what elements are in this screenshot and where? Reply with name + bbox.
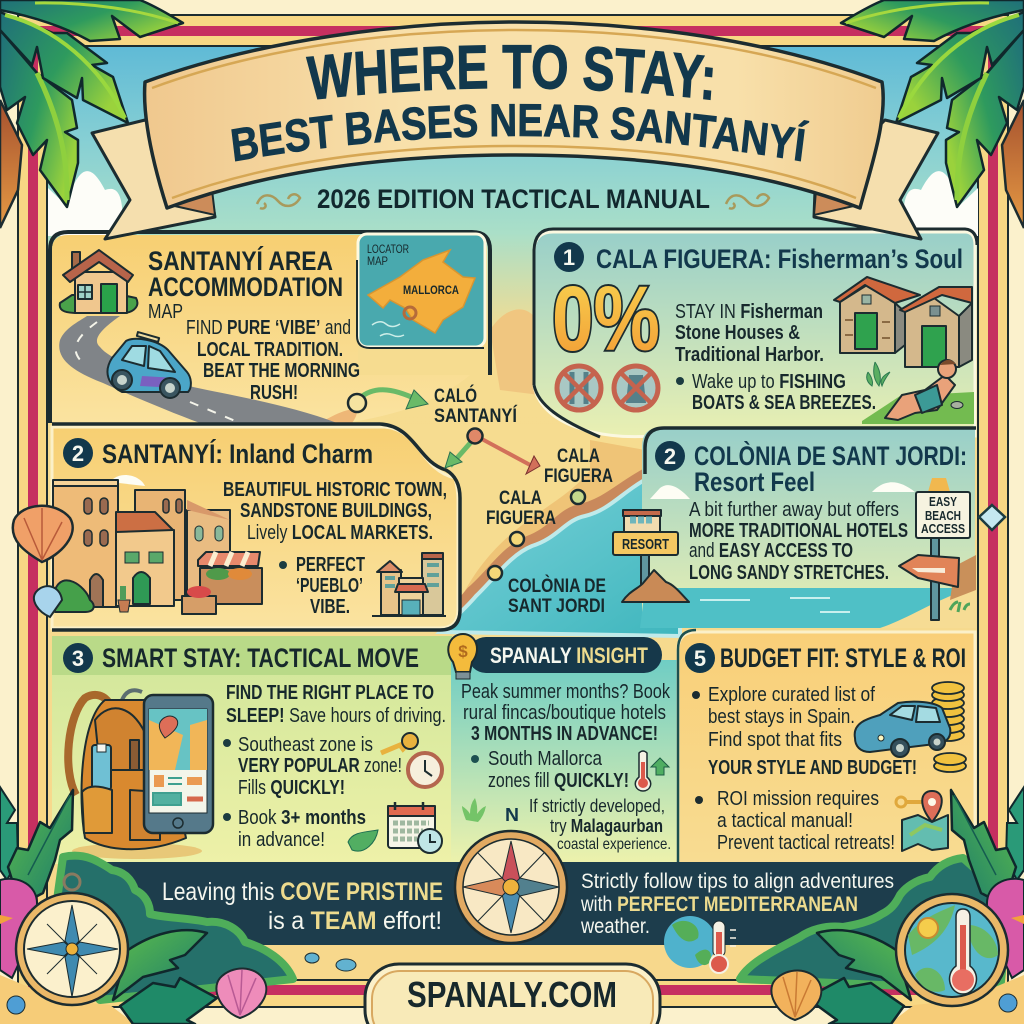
text: explore curated list: Explore curated list of — [708, 684, 875, 706]
heading: Santanyí area accommodation: SANTANYÍ AREA — [148, 245, 333, 276]
badge 5 — [685, 643, 715, 673]
text: a bit further away: LONG SANDY STRETCHES. — [689, 562, 889, 584]
badge 1 — [554, 242, 584, 272]
text: peak summer months — [461, 681, 671, 745]
text: leaving this cove pristine: Leaving this COVE PRISTINE — [162, 878, 443, 906]
locator map — [357, 234, 485, 348]
bottom foliage right — [807, 787, 1024, 1024]
text: beautiful historic town: SANDSTONE BUILDINGS, — [240, 500, 432, 522]
map labels: CALA — [557, 446, 600, 467]
text: ROI mission: a tactical manual! — [717, 810, 853, 832]
clouds — [48, 171, 978, 236]
text: explore curated list — [692, 684, 917, 779]
icon: no crowds crossed signs — [557, 366, 658, 410]
text: a bit further away — [689, 499, 908, 584]
icon: house — [60, 250, 137, 313]
text: beautiful historic town: Lively LOCAL MARKETS. — [247, 522, 433, 544]
map labels: SANTANYÍ — [434, 405, 518, 427]
text: book 3+ months: Book 3+ months — [238, 807, 366, 829]
panel: Colònia de Sant Jordi resort feel — [640, 428, 976, 628]
heading: smart stay: SMART STAY: TACTICAL MOVE — [102, 643, 419, 673]
locator map: MAP — [367, 254, 388, 268]
text: southeast zone: VERY POPULAR zone! — [238, 755, 402, 777]
map labels: CALÓ — [434, 385, 477, 407]
badge 2: 2 — [72, 441, 84, 466]
icon: resort sign and rock — [613, 510, 689, 602]
text: leaving this cove pristine: is a TEAM effort! — [268, 907, 442, 935]
panel: Santanyí area accommodation map — [50, 232, 490, 423]
icon: light bulb: $ — [458, 642, 468, 661]
text: leaving this cove pristine — [162, 878, 443, 935]
text: perfect pueblo vibe: ‘PUEBLO’ — [296, 575, 363, 597]
palm tree right — [841, 0, 1024, 228]
text: south Mallorca: South Mallorca — [488, 748, 603, 770]
panel: smart stay tactical move — [52, 636, 452, 864]
badge 2 — [63, 438, 93, 468]
text: stay in fisherman stone houses: Stone Houses & — [675, 322, 800, 344]
compass: center — [455, 831, 567, 943]
text: perfect pueblo vibe: VIBE. — [310, 596, 350, 618]
text: peak summer months: 3 MONTHS IN ADVANCE! — [471, 723, 658, 745]
text: stay in fisherman stone houses — [675, 301, 824, 366]
text: wake up to fishing boats: Wake up to FISHING — [692, 371, 846, 393]
icon: small town buildings — [372, 553, 446, 616]
badge 2 — [655, 441, 685, 471]
water and beach — [640, 555, 976, 628]
bottom foliage left — [0, 787, 217, 1024]
title: BEST BASES NEAR SANTANYÍ — [231, 104, 810, 162]
text: a bit further away: MORE TRADITIONAL HOTELS — [689, 520, 908, 542]
text: find the right place — [226, 682, 446, 727]
icon: easy beach access signpost: EASY — [929, 494, 957, 509]
map route: arrows and stops — [348, 390, 585, 580]
map labels: COLÒNIA DE — [508, 575, 606, 597]
icon: key, pin and map — [896, 791, 948, 851]
heading: inland charm: SANTANYÍ: Inland Charm — [102, 438, 373, 469]
icon: coins — [932, 682, 966, 772]
text: explore curated list: best stays in Spain. — [708, 706, 855, 728]
map labels: CALA — [499, 488, 542, 509]
icon: grass — [462, 798, 486, 822]
weather globe medallion: right — [896, 894, 1008, 1006]
text: beautiful historic town: BEAUTIFUL HISTORIC TOWN, — [223, 479, 447, 501]
text: strictly follow tips: with PERFECT MEDITERRANEAN — [580, 893, 858, 916]
icon: light bulb — [448, 634, 477, 679]
title: WHERE TO STAY: — [306, 44, 713, 100]
text: peak summer months: rural fincas/boutique hotels — [463, 702, 666, 724]
title — [231, 44, 810, 162]
text: wake up to fishing boats: BOATS & SEA BREEZES. — [692, 392, 876, 414]
website pill — [365, 964, 660, 1024]
map: central sand and coast — [340, 309, 648, 640]
subtitle: 2026 EDITION TACTICAL MANUAL — [317, 184, 710, 214]
bush right — [740, 858, 1010, 990]
compass: left — [16, 874, 128, 1005]
icon: calendar and leaf — [348, 802, 442, 853]
badge 3 — [63, 643, 93, 673]
icon: easy beach access signpost: ACCESS — [921, 521, 965, 536]
icon: key and clock — [381, 733, 442, 787]
panel: Spanaly insight — [448, 634, 678, 864]
text: explore curated list: YOUR STYLE AND BUDGET! — [708, 757, 917, 779]
text: southeast zone — [223, 734, 402, 799]
heading: Colònia de Sant Jordi — [694, 440, 967, 497]
heading: Colònia de Sant Jordi: Resort Feel — [694, 467, 815, 497]
illustration: sandstone town — [53, 475, 230, 612]
icon: resort sign and rock: RESORT — [622, 536, 669, 553]
letter N: N — [505, 805, 519, 825]
text: find the right place: SLEEP! Save hours of driving. — [226, 705, 446, 727]
heading: Santanyí area accommodation — [148, 245, 343, 323]
text: a bit further away: and EASY ACCESS TO — [689, 540, 853, 562]
map labels: SANT JORDI — [508, 596, 605, 617]
text: south Mallorca — [471, 748, 629, 792]
text: stay in fisherman stone houses: Traditional Harbor. — [675, 344, 824, 366]
text: beautiful historic town — [223, 479, 447, 544]
heading: Santanyí area accommodation: ACCOMMODATION — [148, 272, 343, 302]
panel: Santanyí inland charm — [52, 424, 460, 630]
text: strictly follow tips — [580, 870, 894, 938]
stat: 0%: 0% — [552, 268, 660, 370]
panel: Cala Figuera fisherman's soul — [534, 229, 977, 437]
illustration: backpack — [68, 690, 202, 859]
text: find pure vibe: FIND PURE ‘VIBE’ and — [186, 317, 351, 339]
text: book 3+ months: in advance! — [238, 829, 325, 851]
locator map: MALLORCA — [403, 283, 459, 297]
icon: market stall — [182, 552, 262, 614]
sea — [440, 478, 680, 636]
illustration: phone with map — [144, 695, 213, 833]
title ribbon — [92, 22, 938, 239]
text: if strictly developed — [529, 796, 671, 853]
text: southeast zone: Southeast zone is — [238, 734, 373, 756]
text: wake up to fishing boats — [676, 371, 876, 414]
text: find the right place: FIND THE RIGHT PLACE TO — [226, 682, 434, 704]
text: south Mallorca: zones fill QUICKLY! — [488, 770, 629, 792]
illustration: relaxing man and grass — [862, 360, 974, 424]
shells and pebbles — [7, 506, 1017, 1020]
text: peak summer months: Peak summer months? Book — [461, 681, 671, 703]
map labels: FIGUERA — [486, 508, 556, 529]
locator map: LOCATOR — [367, 242, 409, 256]
icon: globe and thermometer — [664, 916, 736, 973]
text: southeast zone: Fills QUICKLY! — [238, 777, 345, 799]
icon: easy beach access signpost: BEACH — [925, 508, 961, 523]
text: find pure vibe: RUSH! — [250, 382, 298, 404]
callout banner — [100, 862, 965, 945]
text: ROI mission — [695, 788, 895, 854]
text: strictly follow tips: Strictly follow tips to align adventures — [581, 870, 894, 893]
text: if strictly developed: coastal experience. — [557, 836, 671, 853]
text: perfect pueblo vibe — [279, 554, 365, 618]
text: book 3+ months — [223, 807, 366, 851]
badge 1: 1 — [563, 245, 575, 270]
bush left — [50, 856, 293, 1000]
text: if strictly developed: try Malagaurban — [550, 816, 663, 836]
text: ROI mission: Prevent tactical retreats! — [717, 832, 895, 854]
icon: blue car — [855, 702, 950, 757]
text: find pure vibe: LOCAL TRADITION. — [197, 339, 343, 361]
map labels: FIGUERA — [544, 466, 613, 487]
heading: Santanyí area accommodation: MAP — [148, 301, 183, 323]
diamond ornament — [979, 505, 1005, 530]
header pill: SPANALY INSIGHT — [490, 643, 648, 668]
icon: winding road — [59, 316, 337, 423]
text: if strictly developed: If strictly developed, — [529, 796, 665, 816]
text: perfect pueblo vibe: PERFECT — [296, 554, 365, 576]
text: explore curated list: Find spot that fits — [708, 729, 842, 751]
text: find pure vibe: BEAT THE MORNING — [203, 360, 360, 382]
badge 2: 2 — [664, 444, 676, 469]
text: ROI mission: ROI mission requires — [717, 788, 879, 810]
text: stay in fisherman stone houses: STAY IN Fisherman — [675, 301, 823, 323]
badge 5: 5 — [694, 646, 706, 671]
icon: thermometer with arrow — [635, 751, 669, 791]
website pill: SPANALY.COM — [407, 974, 617, 1015]
panel: budget fit — [678, 630, 975, 864]
illustration: stone houses — [834, 277, 972, 367]
icon: easy beach access signpost — [899, 478, 970, 620]
text: strictly follow tips: weather. — [580, 915, 650, 938]
text: find pure vibe — [186, 317, 360, 404]
text: a bit further away: A bit further away but offers — [689, 499, 899, 521]
header pill — [468, 637, 662, 673]
palm tree left — [0, 0, 183, 228]
icon: car — [107, 332, 191, 398]
badge 3: 3 — [72, 646, 84, 671]
map labels — [434, 385, 613, 617]
